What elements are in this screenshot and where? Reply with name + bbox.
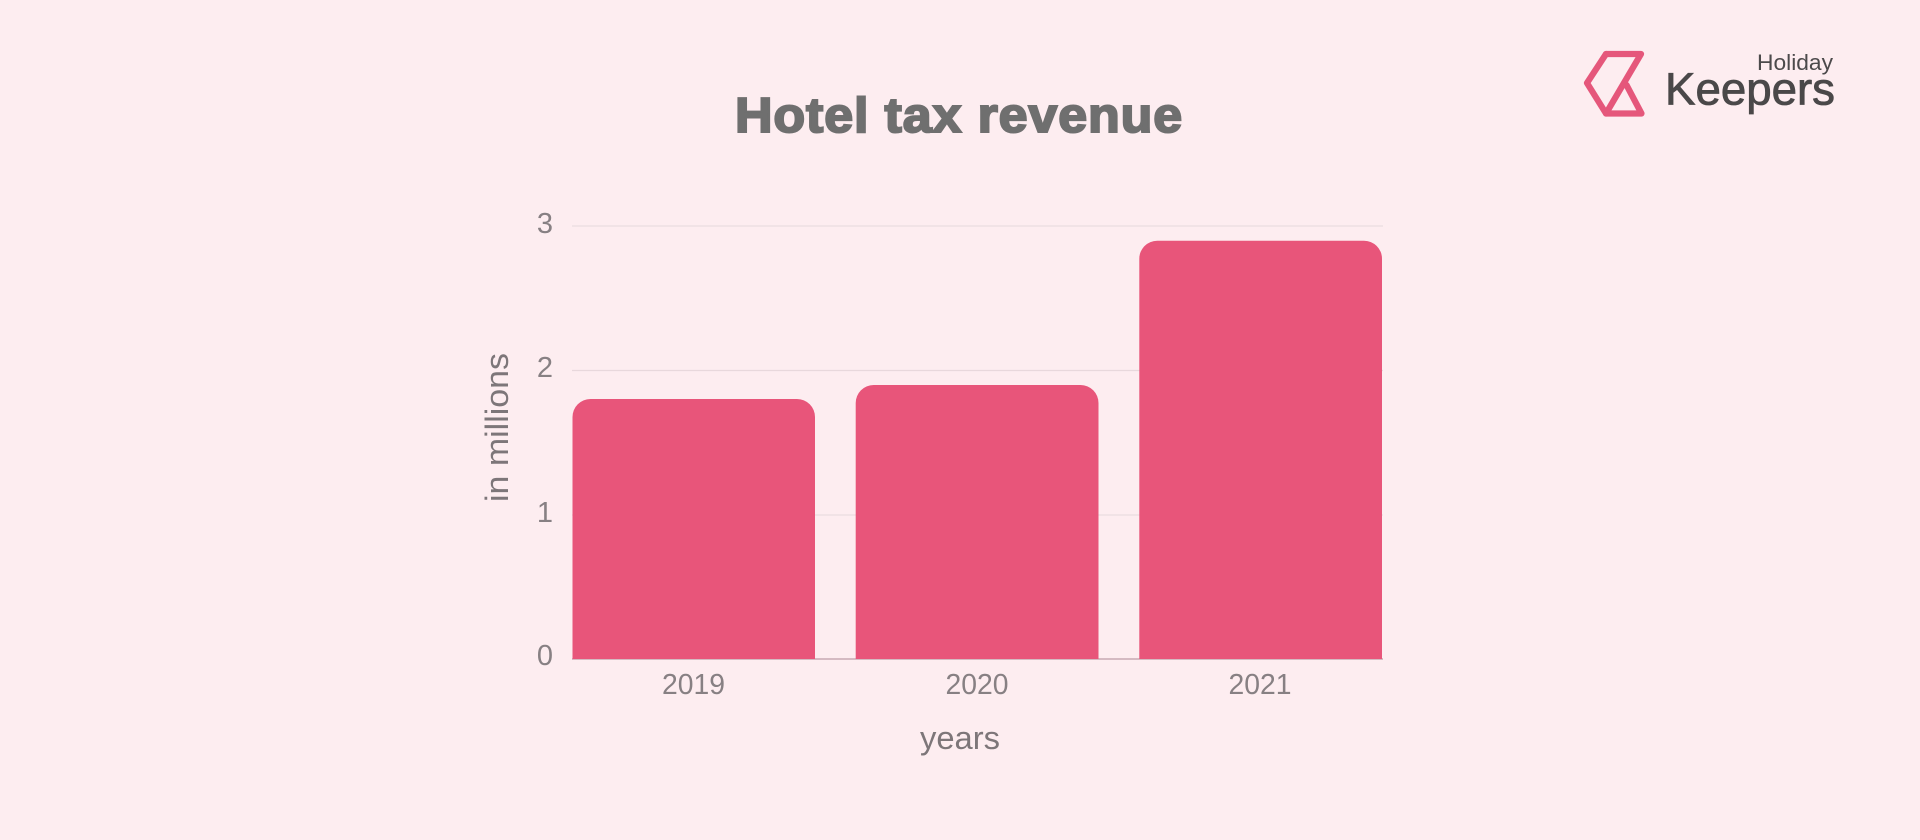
bar chart [479,208,1383,756]
x axis title: years [920,720,1000,756]
bar: 2019 [572,399,815,659]
x label: 2021: 2021 [1228,669,1292,701]
bar: 2021 [1139,241,1382,659]
logo [1587,50,1835,114]
y tick labels [537,208,553,672]
y tick labels: 0 [537,640,553,672]
icon: logo mark [1587,54,1642,114]
logo wordmark: Keepers: Keepers [1665,64,1835,114]
y tick labels: 3 [537,208,553,240]
y tick labels: 1 [537,497,553,529]
y axis title: in millions [479,353,515,502]
logo wordmark: Holiday: Holiday [1757,50,1833,75]
bar: 2020 [856,385,1098,659]
x label: 2020: 2020 [946,669,1008,701]
x label: 2019: 2019 [662,669,725,701]
y tick labels: 2 [537,352,553,384]
title: Hotel tax revenue [735,89,1183,143]
